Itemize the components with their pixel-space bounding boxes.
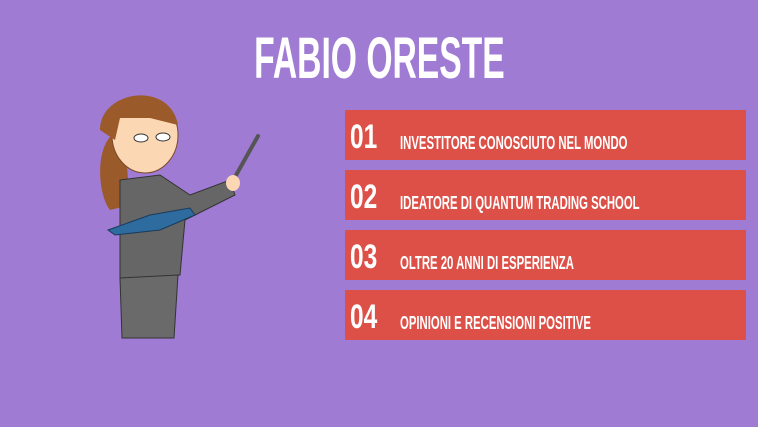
item 1: INVESTITORE CONOSCIUTO NEL MONDO [400,133,627,153]
pointer [235,136,258,177]
item 1: 01 [350,118,377,156]
illustration: teacher [100,95,260,338]
book [108,208,195,235]
item 2: 02 [350,178,377,216]
item 4 [345,290,746,340]
eyes [134,134,148,142]
item 3: OLTRE 20 ANNI DI ESPERIENZA [400,253,574,273]
item 1 [345,110,746,160]
item 4: 04 [350,298,377,336]
body [120,175,235,280]
hair top [100,95,178,140]
item 2 [345,170,746,220]
item 2: IDEATORE DI QUANTUM TRADING SCHOOL [400,193,640,213]
item 3 [345,230,746,280]
item 3: 03 [350,238,377,276]
hair back [100,135,130,210]
skirt [120,275,178,338]
item 4: OPINIONI E RECENSIONI POSITIVE [400,313,591,333]
head [112,97,178,173]
hand [226,175,240,191]
title: FABIO ORESTE [254,26,505,91]
